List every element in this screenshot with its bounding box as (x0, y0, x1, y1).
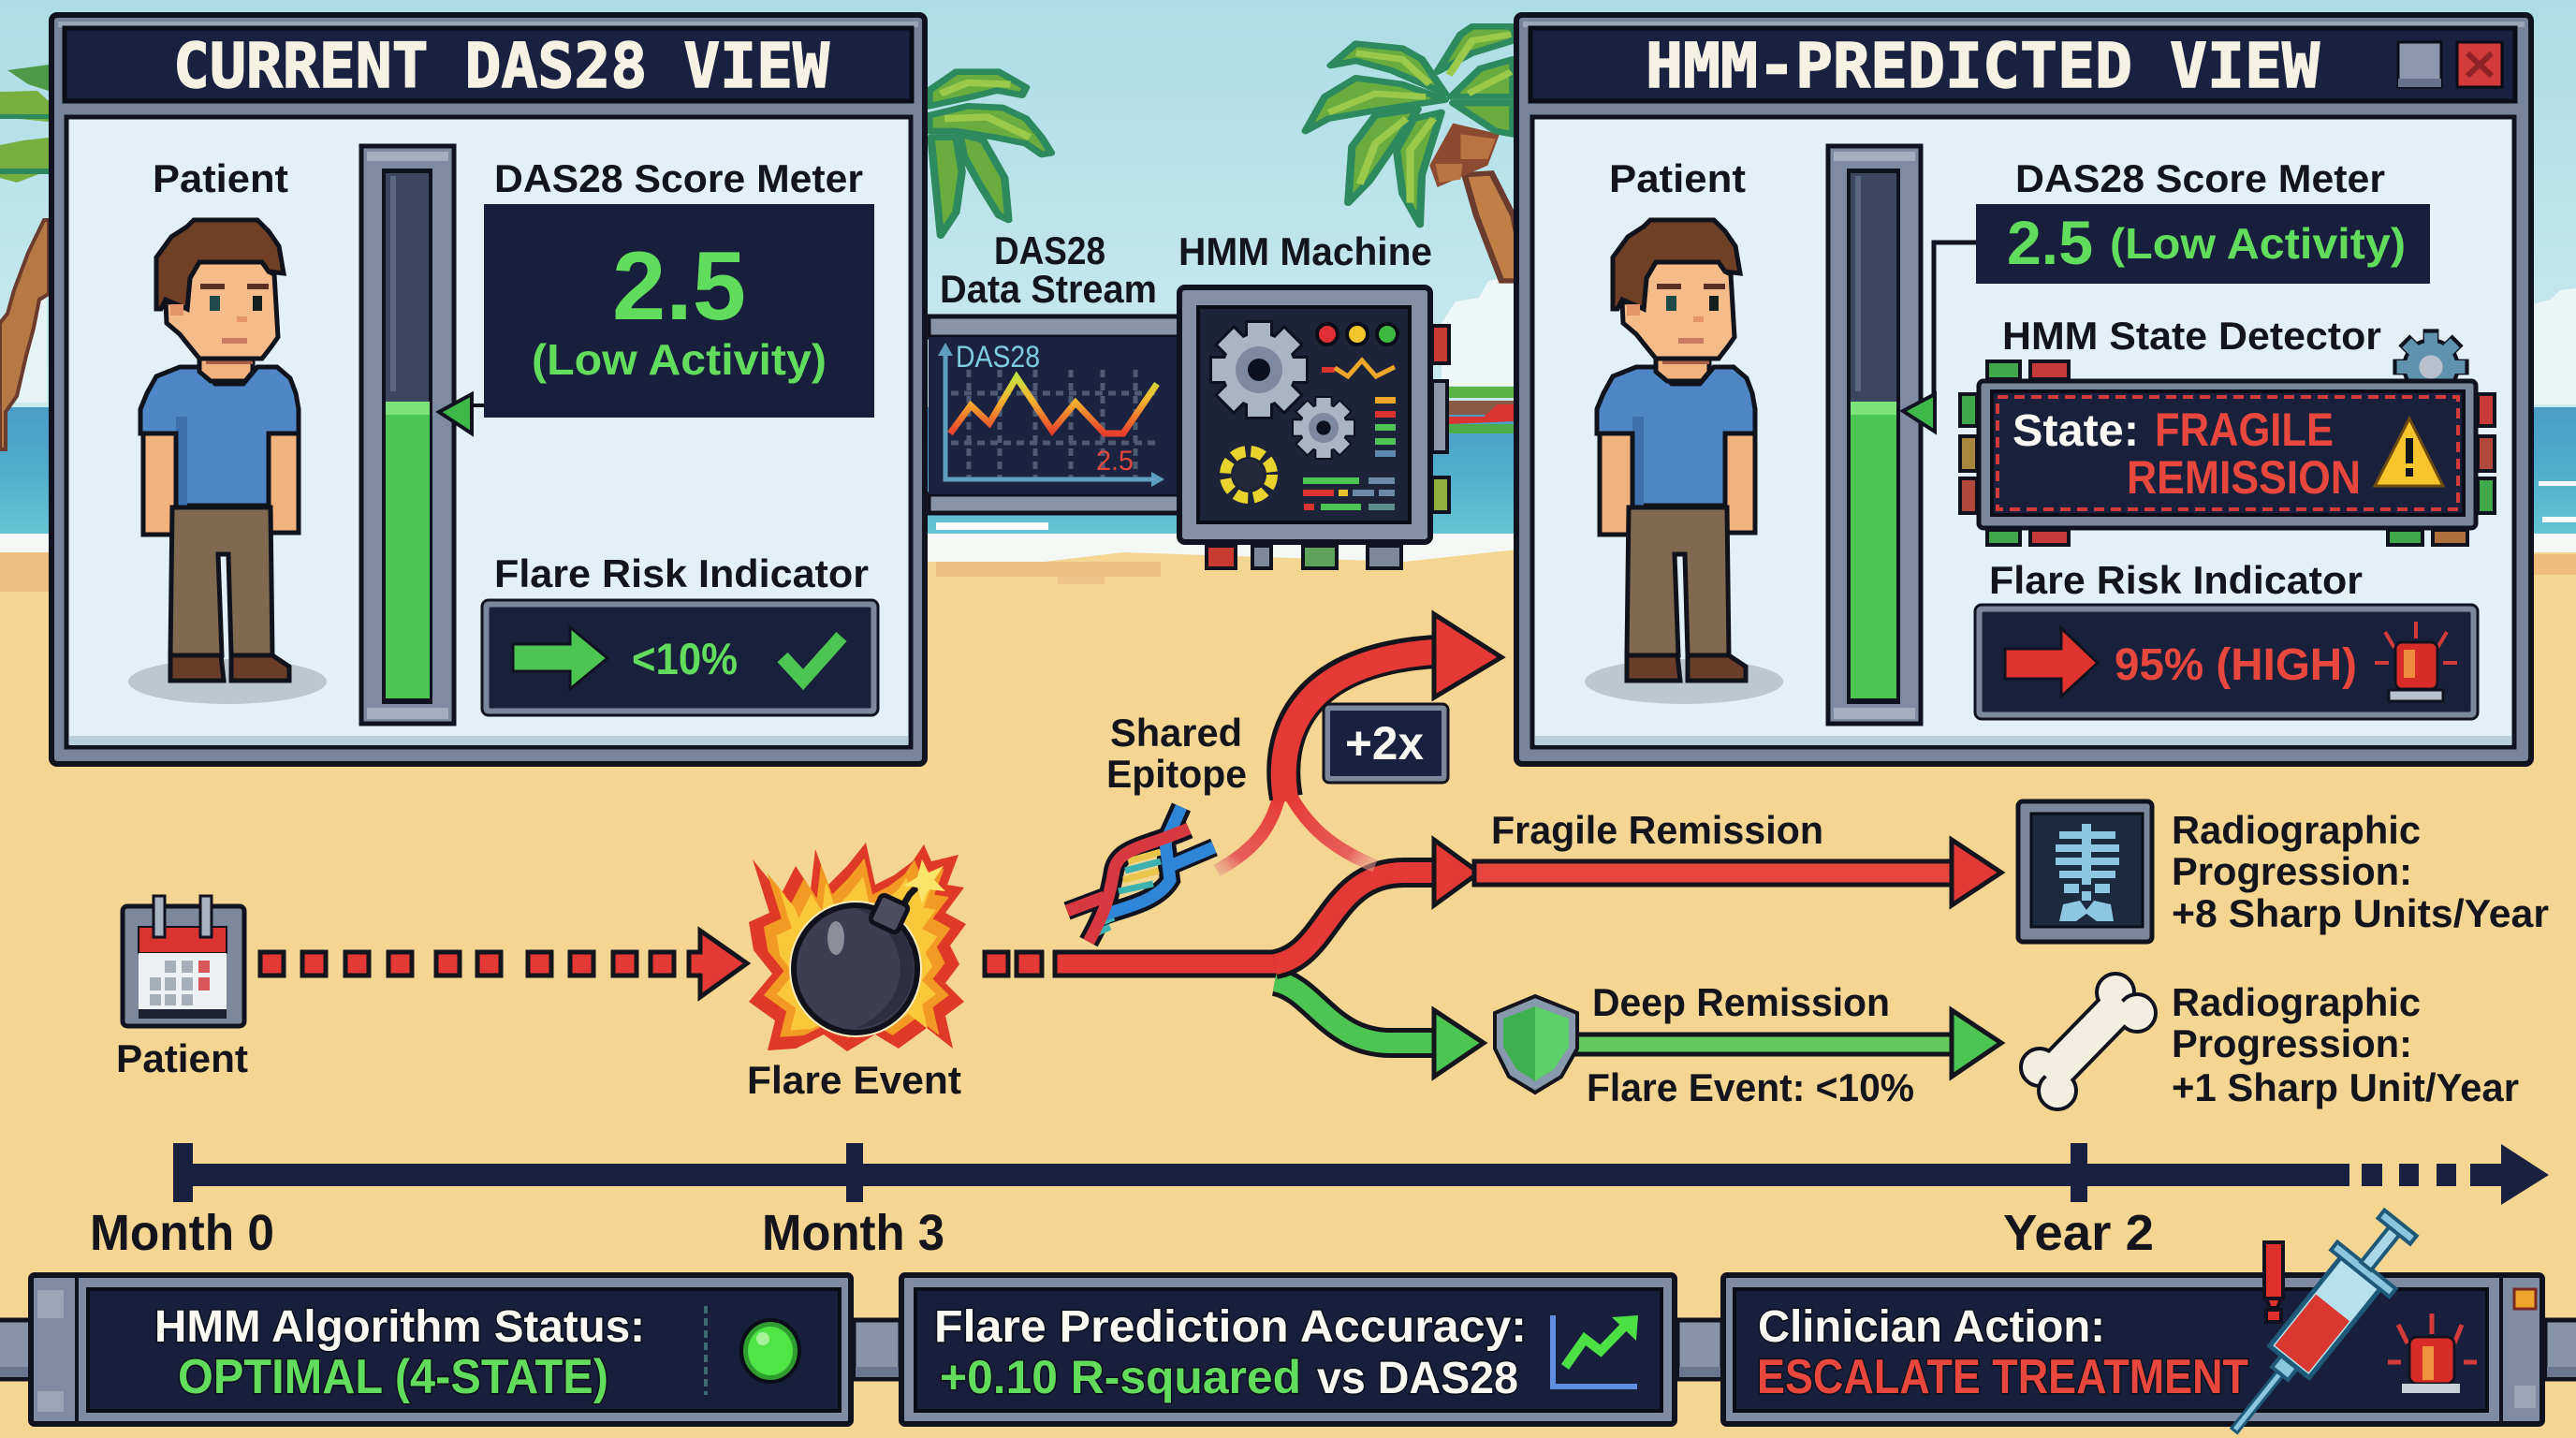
title bar: current DAS28 view: CURRENT DAS28 VIEW (173, 30, 829, 102)
status panel: HMM algorithm (31, 1275, 851, 1424)
timeline label: month 0: Month 0 (90, 1205, 274, 1261)
gauge pointer with connector (1903, 242, 1976, 432)
DAS28 vertical gauge (1828, 146, 1921, 724)
text: radiographic progression +1: Radiographic (2172, 980, 2421, 1024)
icon: alarm beacon (2388, 1313, 2477, 1393)
text: radiographic progression +1: +1 Sharp Unit/Year (2172, 1065, 2519, 1109)
status panel: flare prediction accuracy (901, 1275, 1675, 1424)
patient figure (1585, 220, 1783, 704)
status bars (1303, 397, 1396, 510)
patient figure (128, 220, 327, 704)
status panel: flare prediction accuracy: +0.10 R-squared (940, 1351, 1301, 1403)
DAS28 vertical gauge (361, 146, 454, 724)
window buttons (2398, 42, 2502, 87)
panel: current DAS28 view (51, 15, 925, 764)
icon: rising chart (1553, 1315, 1638, 1387)
label: DAS28 score meter: DAS28 Score Meter (2015, 156, 2385, 200)
timeline label: year 2: Year 2 (2003, 1205, 2154, 1261)
label: patient: Patient (153, 156, 288, 200)
panel: HMM-predicted view (1516, 15, 2531, 764)
status panel: flare prediction accuracy: Flare Prediction Accuracy: (934, 1302, 1527, 1352)
state detector box: FRAGILE (2155, 404, 2334, 456)
label: fragile remission: Fragile Remission (1491, 808, 1823, 852)
state detector box: REMISSION (2127, 451, 2361, 504)
label: deep remission: Deep Remission (1592, 980, 1890, 1024)
DAS28 score display: (Low Activity) (532, 335, 827, 384)
icon: DNA helix (1067, 807, 1214, 942)
DAS28 data stream (929, 228, 1181, 513)
flare risk box: under 10 percent (482, 600, 878, 715)
icon: green arrow (513, 627, 607, 689)
DAS28 score display: (Low Activity) (2110, 219, 2406, 268)
text: radiographic progression +1: Progression: (2172, 1021, 2412, 1065)
timeline axis (173, 1143, 2549, 1205)
multiplier badge (1324, 704, 1448, 783)
state detector box: State: (2012, 406, 2139, 456)
text: radiographic progression +8: Radiographic (2172, 808, 2421, 852)
icon: red arrow (2005, 628, 2098, 697)
label: DAS28 data stream: Data Stream (940, 267, 1157, 311)
status panel: clinician action: Clinician Action: (1758, 1302, 2105, 1352)
state detector box (1960, 361, 2495, 545)
status panel: HMM algorithm: HMM Algorithm Status: (154, 1302, 645, 1352)
title bar: HMM-predicted view: HMM-PREDICTED VIEW (1646, 30, 2320, 102)
multiplier badge: +2x (1345, 717, 1424, 770)
icon: small gear (1294, 398, 1354, 458)
icon: green shield (1495, 996, 1577, 1093)
flare risk box: 95 percent high (1975, 605, 2478, 719)
center palm trees (929, 26, 1527, 281)
line chart screen: DAS28 (956, 340, 1040, 374)
icon: x-ray (2018, 801, 2152, 942)
timeline label: month 3: Month 3 (762, 1205, 944, 1261)
line chart screen (929, 337, 1178, 494)
gauge pointer arrow (439, 394, 487, 433)
label: HMM state detector: HMM State Detector (2002, 314, 2381, 358)
status panel: clinician action (1723, 1275, 2542, 1424)
DAS28 score display: 2.5 (612, 232, 746, 341)
label: DAS28 score meter: DAS28 Score Meter (494, 156, 863, 200)
label: flare event: Flare Event (747, 1058, 961, 1102)
label: shared epitope: Shared (1110, 711, 1242, 755)
indicator lights (1317, 324, 1398, 345)
stripes connecting machine to right panel (1449, 387, 1515, 433)
status panel: clinician action: ESCALATE TREATMENT (1757, 1350, 2248, 1404)
branch: fragile remission red path (1275, 840, 2001, 964)
text: radiographic progression +8: +8 Sharp Units/Year (2172, 891, 2549, 935)
status light: green (741, 1320, 799, 1382)
icon: green check (783, 637, 842, 680)
status panel: HMM algorithm: OPTIMAL (4-STATE) (178, 1350, 608, 1404)
HMM machine (1178, 229, 1449, 568)
icon: exclamation mark (2264, 1242, 2283, 1322)
calendar icon (123, 896, 244, 1026)
DAS28 score display: 2.5 (2007, 208, 2093, 277)
red path after flare event (985, 952, 1280, 976)
label: shared epitope (1106, 711, 1247, 796)
flare risk box: 95 percent high: 95% (HIGH) (2115, 640, 2357, 690)
curved arrow to HMM view (1217, 614, 1501, 871)
panel body (66, 117, 911, 747)
panel body (1532, 117, 2514, 747)
branch: deep remission green path (1275, 981, 2001, 1077)
flare event bomb (749, 843, 966, 1051)
title bar: HMM-predicted view (1530, 28, 2515, 102)
icon: large gear (1212, 323, 1306, 417)
label: flare risk indicator: Flare Risk Indicator (1989, 558, 2363, 602)
mini signal trace (1322, 360, 1395, 376)
left palm tree (0, 65, 49, 449)
label: HMM machine: HMM Machine (1178, 229, 1432, 273)
icon: red beacon (2375, 622, 2457, 701)
icon: yellow gear (1225, 451, 1272, 498)
label: DAS28 data stream: DAS28 (994, 228, 1105, 272)
label: patient: Patient (1609, 156, 1746, 200)
icon: bone (2021, 974, 2156, 1109)
label: DAS28 data stream (940, 228, 1157, 311)
label: shared epitope: Epitope (1106, 752, 1247, 796)
DAS28 score display (484, 204, 874, 418)
icon: syringe (2205, 1199, 2430, 1438)
label: flare risk indicator: Flare Risk Indicator (494, 551, 869, 595)
dashed arrow to flare event (260, 931, 747, 997)
text: radiographic progression +1 (2172, 980, 2519, 1109)
label: flare event under 10 percent: Flare Event: <10% (1587, 1065, 1914, 1109)
status panel: flare prediction accuracy: vs DAS28 (1317, 1354, 1518, 1403)
status bar rails (0, 1320, 2576, 1379)
label: patient timeline start: Patient (116, 1036, 248, 1080)
DAS28 score display (1976, 204, 2430, 284)
text: radiographic progression +8 (2172, 808, 2549, 935)
icon: warning triangle (2375, 418, 2443, 486)
icon: detector gear (2393, 329, 2469, 405)
flare risk box: under 10 percent: <10% (632, 634, 738, 683)
text: radiographic progression +8: Progression: (2172, 849, 2412, 893)
line chart screen: 2.5 (1096, 446, 1134, 477)
